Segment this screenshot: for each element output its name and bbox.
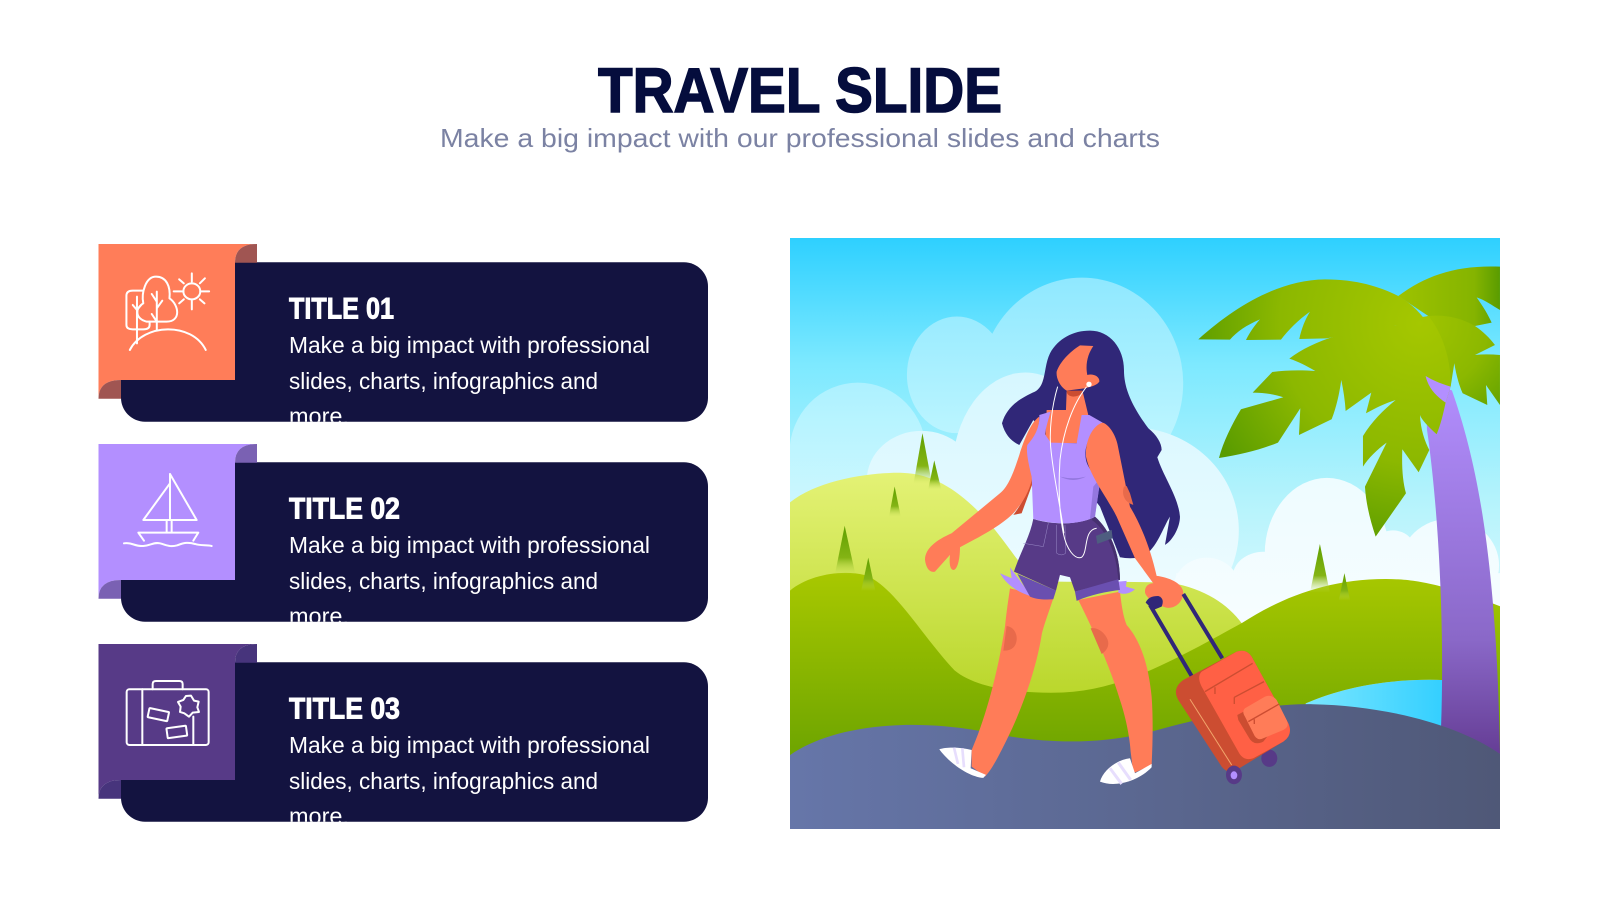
front wheel (1226, 766, 1242, 784)
pocket zip (1248, 704, 1279, 724)
colour tab (98, 244, 257, 399)
body text: more. (289, 603, 349, 629)
traveller: legs and shoes (939, 588, 1153, 784)
heading: TITLE 02 (289, 492, 400, 526)
neck shadow (1067, 391, 1083, 397)
clouds: back layer (790, 278, 1183, 569)
body text: Make a big impact with professional (289, 732, 650, 758)
heading: TITLE 03 (289, 692, 400, 726)
case highlight (1190, 699, 1232, 765)
subtitle: Make a big impact with our professional slides and charts (440, 123, 1160, 153)
title: TRAVEL SLIDE (598, 56, 1002, 126)
body text: more. (289, 403, 349, 429)
right leg (1078, 592, 1153, 773)
neck and chest (1045, 392, 1088, 443)
face (1057, 345, 1099, 391)
top right frond (1398, 266, 1500, 326)
shorts shadow (1092, 517, 1120, 580)
icon: tree, hill and sun (126, 273, 209, 350)
left leg (972, 588, 1053, 777)
body text: Make a big impact with professional (289, 332, 650, 358)
colour tab (98, 444, 257, 599)
body text: more. (289, 803, 349, 829)
card background (121, 462, 708, 622)
body text: Make a big impact with professional (289, 532, 650, 558)
elbow shading (1123, 486, 1133, 505)
shorts stitching (1023, 523, 1066, 555)
right shoe stripes (1110, 763, 1131, 784)
shorts cuff lining (1000, 567, 1135, 597)
left shoe (939, 748, 986, 778)
body text: slides, charts, infographics and (289, 568, 598, 594)
illustration: traveller walking with suitcase (790, 238, 1500, 829)
icon: sailboat (124, 474, 212, 546)
front crown (1219, 316, 1451, 537)
pocket shadow (1237, 710, 1270, 743)
knee shading (1003, 626, 1108, 654)
body text: slides, charts, infographics and (289, 368, 598, 394)
sky (790, 238, 1500, 829)
tab folds (98, 244, 257, 399)
heading: TITLE 01 (289, 292, 394, 326)
body text: slides, charts, infographics and (289, 768, 598, 794)
pocket (1243, 696, 1288, 739)
tab folds (98, 444, 257, 599)
body text (290, 736, 648, 822)
trunk tip (1426, 376, 1451, 403)
card background (121, 262, 708, 422)
back left frond (1198, 279, 1450, 380)
earbud (1086, 382, 1092, 387)
traveller: upper body (925, 331, 1183, 608)
icon: suitcase with stickers (127, 681, 209, 745)
arm shadow (1013, 477, 1033, 515)
right arm and hand (1086, 423, 1183, 608)
body text (290, 336, 648, 422)
back wheel (1261, 750, 1277, 767)
zips (1205, 663, 1264, 704)
card background (121, 662, 708, 822)
handle grip (1146, 596, 1163, 610)
shorts (1014, 517, 1120, 592)
right shoe (1100, 758, 1152, 784)
handle (1150, 594, 1222, 676)
water (1306, 680, 1445, 736)
colour tab (98, 644, 257, 799)
earphones (1050, 387, 1097, 558)
suitcase (1146, 594, 1290, 784)
light green hill (790, 473, 1242, 713)
tab folds (98, 644, 257, 799)
wheel hub (1231, 771, 1237, 779)
palm crown (1198, 266, 1500, 537)
top (1027, 412, 1103, 523)
case body (1176, 651, 1290, 772)
clouds: right group (1173, 478, 1500, 651)
body text (290, 536, 648, 622)
ground (790, 704, 1500, 829)
top shading (1060, 477, 1100, 519)
music player (1096, 530, 1113, 544)
left arm and hand (925, 417, 1039, 572)
left shoe stripes (954, 748, 964, 767)
palm trunk (1426, 377, 1500, 754)
right frond (1420, 316, 1500, 405)
panel: title 02 (98, 444, 708, 629)
dark green hills (790, 573, 1500, 775)
hair (1002, 331, 1180, 558)
panel: title 01 (98, 244, 708, 429)
panel: title 03 (98, 644, 708, 829)
case face (1199, 651, 1290, 759)
small pines (835, 433, 1350, 600)
shorts cuffs (1017, 574, 1120, 601)
clouds: middle layer (867, 373, 1239, 633)
